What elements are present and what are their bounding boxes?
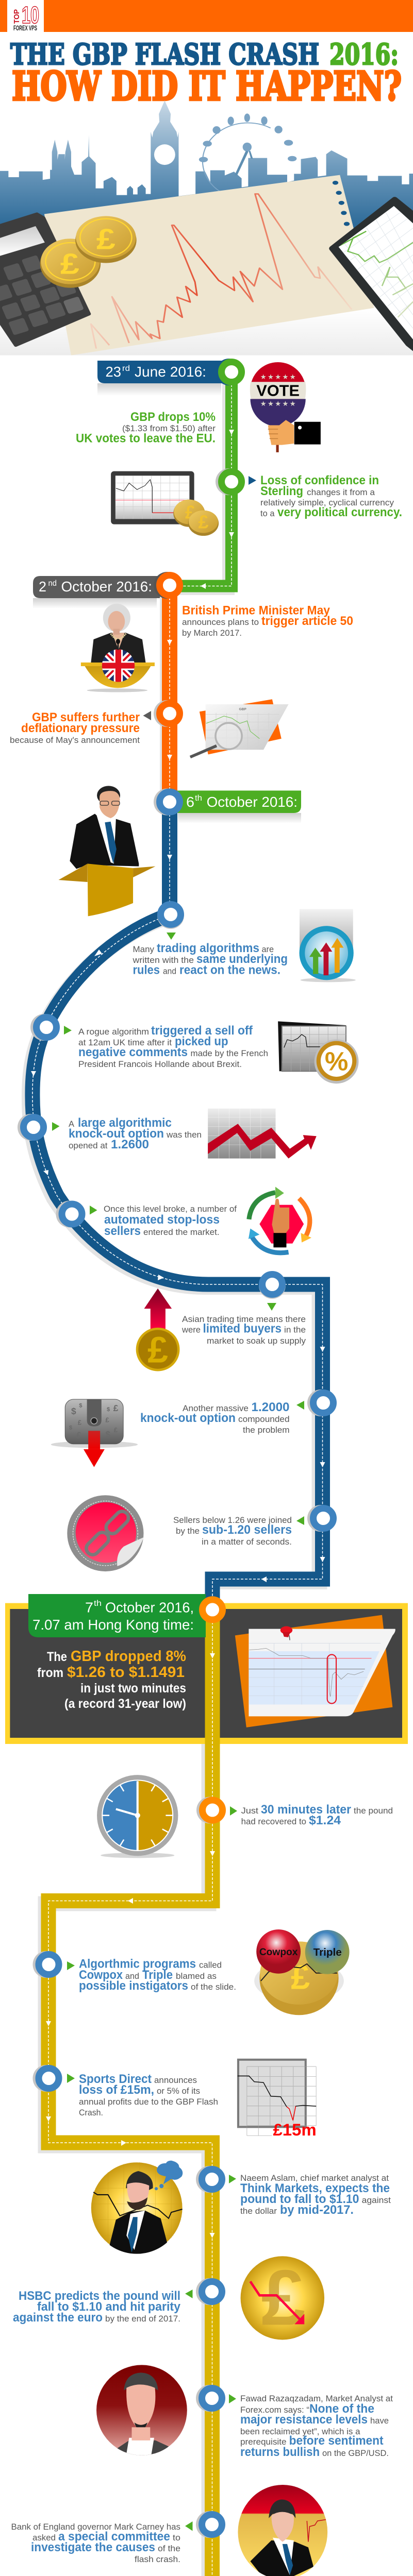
timeline node: Naeem [196,2166,223,2193]
skyline [0,100,413,246]
text: stop-loss sellers [104,1204,237,1238]
date label: 2nd October 2016: 2 [39,579,46,595]
text: rogue algorithm [78,1024,268,1069]
text: trading algorithms: written with the [132,955,194,965]
icon: wallet with down arrow: $ [105,1429,110,1439]
text: Fawad Razaqzadam quote: None of the [309,2402,374,2416]
text: Sports Direct: or 5% of its [157,2086,200,2096]
text: stop-loss sellers: Once this level broke, a number of [104,1204,237,1214]
text: GBP drops 10%: UK votes to leave the EU. [76,432,216,445]
timeline node: Carney [196,2511,223,2538]
text: 30 minutes later: $1.24 [309,1814,341,1827]
text: Cowpox and Triple [79,1957,236,1993]
pointer [296,1401,304,1410]
text: Mark Carney [11,2522,180,2564]
text: trading algorithms [132,941,288,977]
timeline node: orange [154,572,180,599]
icon: chart with percent badge: % [325,1047,348,1076]
pointer [185,2290,193,2298]
text: Fawad Razaqzadam quote: before sentiment [289,2434,384,2448]
icon: wallet with down arrow [51,1399,138,1467]
text: knock-out option 1.2600: 1.2600 [111,1138,149,1151]
timeline node: green [216,359,242,385]
text: Sports Direct: annual profits due to the GBP Flash [79,2097,218,2107]
text: rogue algorithm: at 12am UK time after it [78,1038,172,1047]
date label: 2nd October 2016: nd [48,579,57,588]
text: limited buyers: limited buyers [203,1322,282,1335]
icon: chart monitor with coins [111,471,219,536]
text: rogue algorithm: picked up [175,1035,228,1048]
pointer [67,1961,75,1970]
icon: wallet with down arrow: $ [79,1402,82,1409]
text: 1.2000 knock-out option: knock-out option [140,1411,236,1425]
pound coins: £ [60,248,79,280]
icon: Cowpox and Triple balls on cracked coin: Triple [313,1947,342,1958]
text: loss of confidence: to a [260,509,275,518]
timeline node: orange 2 [154,700,180,727]
icon: chart monitor with coins: £ [199,512,209,532]
text: Mark Carney: flash crash. [135,2554,180,2564]
icon: red zigzag arrow chart [208,1109,317,1159]
text: loss of confidence: very political currency. [277,505,402,519]
pointer [90,1206,97,1215]
text: Sports Direct: announces [154,2075,197,2085]
text: limited buyers: in the [284,1325,306,1334]
text: rogue algorithm: negative comments [78,1045,188,1059]
date label: 23rd June 2016 [97,361,227,396]
text: Naeem Aslam quote: pound to fall to $1.10 [240,2192,359,2206]
pound coins: £ [96,223,115,256]
text: 1.2000 knock-out option: the problem [243,1425,290,1435]
text: Cowpox and Triple: of the slide. [191,1982,236,1992]
text: Cowpox and Triple: and [125,1971,139,1981]
icon: chart with percent badge [278,1021,358,1083]
pointer [167,933,176,940]
pointer [229,2394,236,2403]
timeline node: green 2 [216,468,242,495]
title: THE GBP FLASH CRASH [10,38,319,72]
chart paper [44,175,374,355]
icon: vote badge and hand: ★★★★★ [260,400,296,408]
pointer [249,476,256,485]
tablet [332,199,413,350]
timeline node: Algorthmic programs [33,1951,60,1978]
text: HSBC prediction: HSBC predicts the pound will [19,2289,180,2303]
date label: 23rd June 2016: June 2016: [135,364,206,380]
text: GBP suffers further: deflationary pressure [21,721,140,735]
text: 1.2000 knock-out option: compounded [238,1414,290,1424]
hero illustration: London skyline, chart paper, calculator, coins, tablet [0,100,413,355]
date label: 7 October, Hong Kong time: October 2016, [105,1599,194,1616]
icon: Cowpox and Triple balls on cracked coin: £ [291,1958,310,1996]
text: trading algorithms: are [262,944,274,954]
chart: £15m loss [238,2060,317,2139]
text: GBP drops 10%: ($1.33 from $1.50) after [122,423,216,433]
text: Sports Direct: loss of £15m, [79,2083,154,2097]
text: GBP suffers further [10,710,140,745]
timeline path: yellow segment [45,1609,212,2576]
timeline node: blue start of curve [157,902,184,929]
text: Naeem Aslam quote: by mid-2017. [280,2203,354,2217]
text: trading algorithms: Many [133,944,154,954]
text: Fawad Razaqzadam quote: been reclaimed yet”, which is a [240,2427,360,2436]
timeline path: green segment [170,372,232,589]
icon: Cowpox and Triple balls on cracked coin: Cowpox [259,1946,298,1958]
icon: vote badge and hand [250,362,321,452]
timeline node: Fawad [196,2385,223,2412]
timeline node: curve 3 [56,1200,82,1227]
text: Naeem Aslam quote: Naeem Aslam, chief market analyst at [240,2173,389,2183]
icon: Cowpox and Triple balls on cracked coin [254,1929,350,2015]
calculator [0,214,89,345]
text: Fawad Razaqzadam quote [240,2394,393,2459]
title [10,38,402,110]
text: loss of confidence: Sterling [260,484,303,498]
text: loss of confidence: changes it from a [307,487,375,497]
icon: vote badge and hand: ★★★★★ [260,373,296,381]
timeline node: right 1 [307,1389,334,1416]
text: trading algorithms: trading algorithms [157,941,259,955]
text: 1.2000 knock-out option [140,1400,290,1435]
text: GBP drops 10%: GBP drops 10% [130,410,216,424]
text: sub-1.20 sellers: sub-1.20 sellers [202,1523,292,1537]
text: HSBC prediction: by the end of 2017. [105,2314,180,2324]
date label: 6th October 2016: 6 [186,794,194,810]
text: 30 minutes later: 30 minutes later [261,1803,351,1817]
text: GBP dropped 8%: from [37,1666,63,1680]
timeline node: right 2 [307,1505,334,1532]
pointer [67,2074,75,2083]
timeline node: Sports Direct [33,2065,60,2092]
text: knock-out option 1.2600 [69,1116,202,1151]
text: GBP dropped 8%: (a record 31-year low) [64,1697,186,1711]
text: trading algorithms: and [163,967,176,976]
illustration: Theresa May at podium [81,604,155,692]
text: GBP dropped 8%: GBP dropped 8% [71,1648,186,1665]
pointer [230,1806,237,1816]
icon: stop hand with cycle arrows [249,1187,311,1253]
text: rogue algorithm: President Francois Hollande about Brexit. [78,1059,242,1069]
text: Cowpox and Triple: Algorthmic programs [79,1957,196,1971]
icon: pound coin with red up arrow [136,1289,180,1371]
path arrowheads [31,430,325,2238]
timeline node: top of right segment [259,1272,286,1299]
text: Naeem Aslam quote: against [362,2195,391,2205]
text: limited buyers [181,1314,306,1346]
pointer [267,1303,276,1311]
text: limited buyers: Asian trading time means there [182,1314,306,1324]
text: 30 minutes later: had recovered to [241,1817,306,1826]
text: sub-1.20 sellers: by the [176,1526,200,1536]
icon: wallet with down arrow: $ [69,1425,73,1431]
text: Sports Direct: Sports Direct [79,2072,152,2086]
text: British Prime Minister May: trigger article 50 [261,614,353,628]
dated panel: 7 October dark box [5,1603,408,1744]
text: stop-loss sellers: sellers [104,1224,141,1238]
text: trading algorithms: react on the news. [179,963,280,977]
header bar [0,0,413,35]
timeline node: curve 1 [30,1014,57,1041]
pointer [229,2175,236,2183]
text: British Prime Minister May: announces plans to [182,617,259,627]
text: Cowpox and Triple: blamed as [176,1971,217,1981]
logo: Top 10 Forex VPS [12,2,39,32]
text: British Prime Minister May: British Prime Minister May [182,604,331,617]
text: knock-out option 1.2600: A [69,1119,75,1129]
text: GBP dropped 8%: $1.26 to $1.1491 [67,1664,185,1681]
text: trading algorithms: rules [133,963,160,977]
pointer [52,1122,60,1131]
illustration: Hollande at podium [58,786,155,916]
icon: wallet with down arrow: £ [114,1426,118,1434]
date label: 6th October 2016: October 2016: [207,794,298,810]
icon: GBP chart under magnifier: GBP [239,708,246,711]
text: GBP suffers further: because of May's announcement [10,735,140,745]
text: Mark Carney: a special committee [58,2530,170,2544]
text: Fawad Razaqzadam quote: on the GBP/USD. [322,2448,389,2458]
icon: GBP chart under magnifier [190,699,289,757]
text: loss of confidence [260,473,402,519]
text: rogue algorithm: triggered a sell off [151,1024,253,1038]
text: Naeem Aslam quote [240,2173,391,2217]
pointer [143,711,151,720]
text: stop-loss sellers: automated stop-loss [104,1213,220,1227]
icon: wallet with down arrow: £ [76,1430,81,1440]
text: Cowpox and Triple: called [199,1960,222,1970]
timeline path: orange segment [168,585,170,802]
floor [0,309,413,355]
icon: vote badge and hand: VOTE [256,382,300,400]
text: limited buyers: were [181,1325,201,1334]
text: Mark Carney: of the [158,2544,180,2553]
text: 1.2000 knock-out option: 1.2000 [252,1400,290,1414]
text: Cowpox and Triple: possible instigators [79,1979,188,1993]
text: limited buyers: market to soak up supply [207,1336,306,1346]
date label: 7 October, Hong Kong time: 7.07 am Hong Kong time: [32,1617,194,1633]
icon: clock half blue half gold [97,1775,178,1858]
portrait: Mark Carney [238,2485,327,2576]
timeline node: curve 2 [18,1114,44,1141]
text: HSBC prediction [13,2289,181,2325]
date label: 2nd October 2016: October 2016: [61,579,152,595]
text: knock-out option 1.2600: knock-out option [69,1127,164,1141]
text: Fawad Razaqzadam quote: Forex.com says: “ [240,2405,309,2415]
pound coins [40,216,137,288]
text: HSBC prediction: fall to $1.10 and hit parity [37,2300,181,2314]
icon: algorithm arrows in circle [299,909,356,982]
icon: wallet with down arrow: $ [107,1406,110,1413]
text: GBP dropped 8% [37,1648,186,1711]
date label: 23rd June 2016: 23 [105,364,121,380]
text: loss of confidence: Loss of confidence in [260,473,379,487]
date label: 7 October, Hong Kong time: th [94,1599,102,1608]
icon: chart monitor with coins: £ [185,502,195,522]
date label: 6th October 2016: th [195,794,202,803]
text: rogue algorithm: A rogue algorithm [78,1027,149,1037]
icon: wallet with down arrow: £ [113,1403,119,1413]
text: Fawad Razaqzadam quote: returns bullish [240,2445,320,2459]
text: knock-out option 1.2600: opened at [69,1141,108,1150]
icon: pound coin with red up arrow: £ [147,1330,168,1371]
text: Mark Carney: investigate the causes [31,2540,155,2554]
text: loss of confidence: relatively simple, cyclical currency [260,498,394,507]
pointer [185,2521,193,2531]
timeline node: blue [154,788,180,815]
text: Naeem Aslam quote: the dollar [240,2206,277,2216]
icon: wallet with down arrow: $ [71,1406,76,1416]
text: trading algorithms: same underlying [196,952,288,966]
icon: wallet with down arrow: £ [105,1416,109,1423]
text: Fawad Razaqzadam quote: have [370,2416,389,2426]
date label: 2nd October 2016 [33,576,160,608]
text: Fawad Razaqzadam quote: prerequisite [240,2437,287,2447]
timeline node: HSBC [196,2278,223,2305]
text: Cowpox and Triple: Cowpox [79,1968,123,1982]
timeline node: orange mid [196,1797,223,1824]
pointer [64,1026,72,1035]
portrait: Fawad Razaqzadam [96,2365,187,2462]
text: Fawad Razaqzadam quote: major resistance levels [240,2413,368,2427]
text: rogue algorithm: made by the French [191,1048,268,1058]
date label: 23rd June 2016: rd [122,364,130,373]
text: GBP drops 10% [76,410,216,445]
text: Sports Direct: Crash. [79,2108,103,2117]
text: Sports Direct [79,2072,218,2117]
text: Fawad Razaqzadam quote: Fawad Razaqzadam, Market Analyst at [240,2394,393,2403]
text: GBP dropped 8%: in just two minutes [80,1681,186,1696]
text: British Prime Minister May [182,604,353,638]
icon: pound with falling red arrow: £ [261,2254,305,2342]
text: 30 minutes later: the pound [354,1806,393,1816]
pointer [296,1516,304,1525]
text: stop-loss sellers: entered the market. [143,1227,220,1237]
text: Cowpox and Triple: Triple [142,1968,173,1982]
icon: broken chain sticker [67,1495,144,1571]
text: GBP suffers further: GBP suffers further [32,710,140,724]
timeline path: dark blue segment [29,802,322,1602]
illustration: pinned flash crash chart [235,1615,395,1727]
portrait: Naeem Aslam [91,2161,183,2254]
icon: pound with falling red arrow [241,2254,324,2342]
text: 30 minutes later [241,1803,393,1827]
text: GBP dropped 8%: The [47,1650,67,1664]
date label: 6th October 2016 [173,790,301,823]
logo: Top 10 Forex VPS: FOREX VPS [13,24,37,32]
London Eye [186,109,310,214]
text: sub-1.20 sellers: Sellers below 1.26 were joined [173,1515,292,1525]
text: Mark Carney: to [173,2533,180,2543]
logo: Top 10 Forex VPS: TOP [12,9,21,24]
date label: 7 October, Hong Kong time [28,1594,206,1637]
text: 1.2000 knock-out option: Another massive [183,1403,249,1413]
text: Naeem Aslam quote: Think Markets, expects the [240,2181,390,2195]
text: 30 minutes later: Just [241,1806,258,1816]
timeline node: orange on yellow [202,1600,223,1620]
date label: 7 October, Hong Kong time: 7 [85,1599,93,1616]
text: Mark Carney: asked [32,2533,56,2543]
text: knock-out option 1.2600: large algorithmic [78,1116,172,1130]
text: sub-1.20 sellers [173,1515,292,1547]
text: Mark Carney: Bank of England governor Mark Carney has [11,2522,180,2532]
chart: £15m loss: £15m [273,2120,317,2139]
text: British Prime Minister May: by March 2017. [182,628,242,638]
text: HSBC prediction: against the euro [13,2311,103,2325]
icon: wallet with down arrow: £ [78,1419,82,1427]
text: knock-out option 1.2600: was then [166,1130,202,1140]
logo: Top 10 Forex VPS: 10 [22,2,39,28]
text: sub-1.20 sellers: in a matter of seconds. [202,1537,292,1547]
